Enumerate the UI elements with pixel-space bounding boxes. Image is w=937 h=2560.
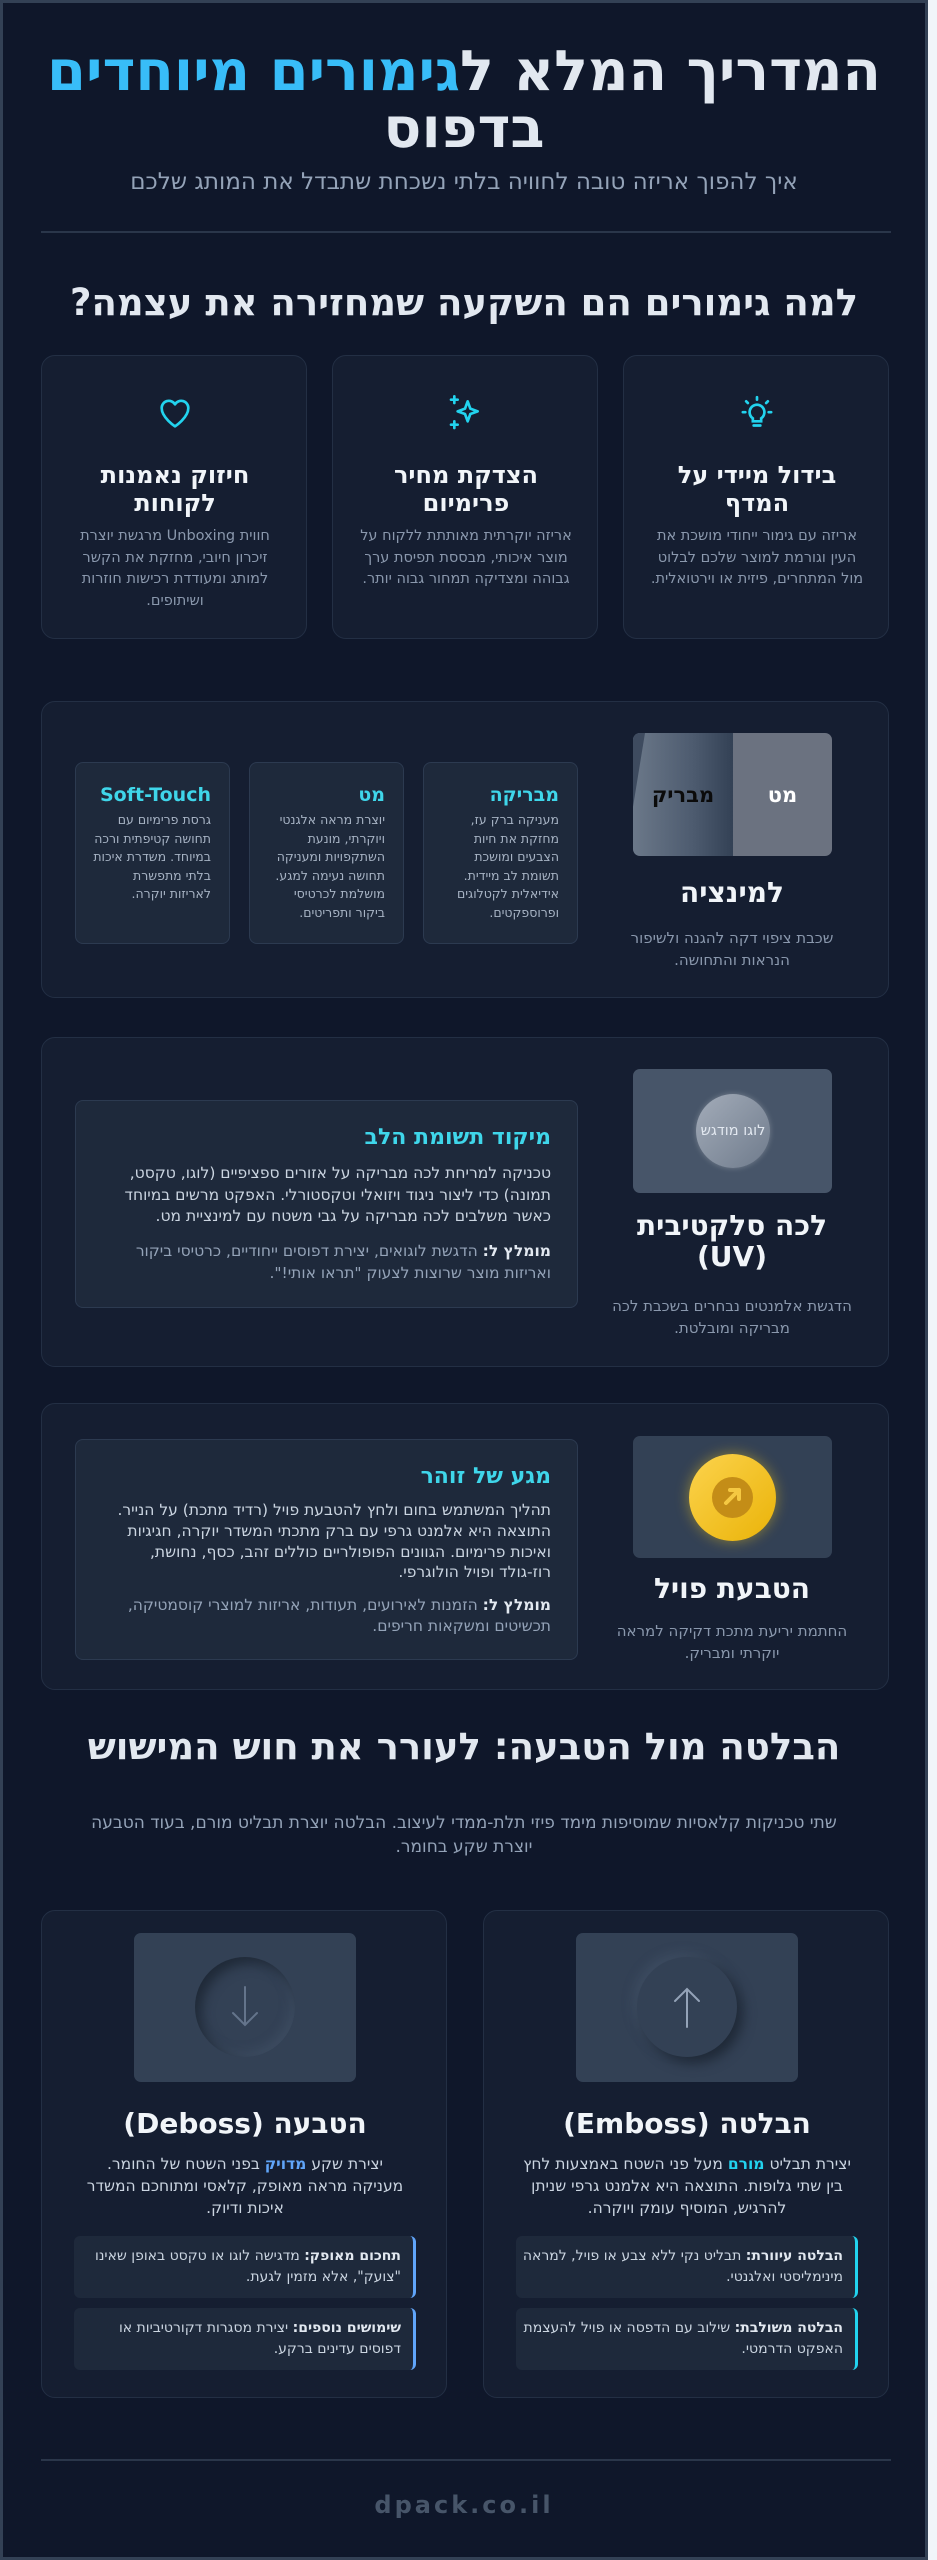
- UV detail box: מומלץ ל: הדגשת לוגואים, יצירת דפוסים ייחודיים, כרטיסי ביקור ואריזות מוצר שרוצות לצעוק "תראו אותי!".: [136, 1242, 551, 1282]
- callout: other uses: [74, 2308, 416, 2370]
- card title: חיזוק נאמנות: [101, 461, 249, 489]
- UV detail box: מיקוד תשומת הלב: [365, 1125, 551, 1150]
- icon: gold coin: [689, 1454, 776, 1541]
- panel: spot UV: [41, 1037, 889, 1367]
- card title: הצדקת מחיר: [394, 461, 538, 489]
- UV visual: [633, 1069, 832, 1193]
- UV text: הדגשת אלמנטים נבחרים בשכבת לכה מבריקה ומובלטת.: [612, 1297, 852, 1337]
- emboss title: הבלטה (Emboss): [563, 2107, 811, 2140]
- sub-card: soft touch: Soft-Touch: [100, 784, 211, 806]
- foil detail box: מגע של זוהר: [421, 1464, 551, 1489]
- sub-card: glossy: [423, 762, 578, 944]
- callout: blind emboss: [516, 2236, 858, 2298]
- sub-card: glossy: מבריקה: [490, 784, 559, 806]
- foil title: הטבעת פויל: [654, 1572, 810, 1605]
- lamination text: שכבת ציפוי דקה להגנה ולשיפור הנראות והתחושה.: [631, 929, 833, 969]
- UV detail box: טכניקה למריחת לכה מבריקה על אזורים ספציפיים (לוגו, טקסט, תמונה) כדי ליצור ניגוד ויזואלי וטקסטורלי. האפקט מרשים במיוחד כאשר משלבים לכה מבריקה על גבי משטח עם למינציית מט.: [124, 1164, 551, 1225]
- sub-card: soft touch: [75, 762, 230, 944]
- UV title: (UV): [697, 1240, 767, 1273]
- card title: בידול מיידי על: [678, 461, 836, 489]
- panel: benefit 2: [332, 355, 598, 639]
- callout: subtle: תחכום מאופק: מדגישה לוגו או טקסט באופן שאינו "צועק", אלא מזמין לגעת.: [95, 2248, 401, 2285]
- UV detail box: [75, 1100, 578, 1308]
- emboss visual: [576, 1933, 798, 2082]
- card title: פרימיום: [423, 489, 509, 517]
- foil detail box: מומלץ ל: הזמנות לאירועים, תעודות, אריזות למוצרי קוסמטיקה, תכשיטים ומשקאות חריפים.: [128, 1596, 551, 1635]
- sub-card: glossy: מעניקה ברק עז, מחזקת את חיות הצבעים ומושכת תשומת לב מיידית. אידיאלית לקטלוגים ופרוספקטים.: [457, 812, 559, 920]
- heading: why finishes: למה גימורים הם השקעה שמחזירה את עצמה?: [70, 281, 858, 324]
- card text: אריזה עם גימור ייחודי מושכת את העין וגורמת למוצר שלכם לבלוט מול המתחרים, פיזית או וירטואלית.: [651, 528, 863, 587]
- section intro: שתי טכניקות קלאסיות שמוסיפות מימד פיזי תלת-ממדי לעיצוב. הבלטה יוצרת תבליט מורם, בעוד הטבעה יוצרת שקע בחומר.: [91, 1813, 837, 1857]
- UV title: לכה סלקטיבית: [637, 1209, 827, 1242]
- panel: benefit 1: [623, 355, 889, 639]
- foil visual: [633, 1436, 832, 1558]
- foil detail box: תהליך המשתמש בחום ולחץ להטבעת פויל (רדיד מתכת) על הנייר. התוצאה היא אלמנט גרפי עם ברק מתכתי המשדר יוקרה, חגיגיות ואיכות פרימיום. הגוונים הפופולריים כוללים זהב, כסף, נחושת, רוז-גולד ופויל הולוגרפי.: [117, 1501, 551, 1581]
- icon: raised circle with up arrow: [637, 1957, 737, 2057]
- callout: combined emboss: [516, 2308, 858, 2370]
- UV title: [637, 1209, 827, 1273]
- panel: emboss: [483, 1910, 889, 2398]
- lamination visual: [633, 733, 832, 856]
- heading: emboss vs deboss: הבלטה מול הטבעה: לעורר את חוש המישוש: [88, 1725, 840, 1768]
- callout: other uses: שימושים נוספים: יצירת מסגרות דקורטיביות או דפוסים עדינים ברקע.: [119, 2320, 401, 2357]
- sub-card: soft touch: גרסת פרימיום עם תחושה קטיפתית ורכה במיוחד. משדרת איכות בלתי מתפשרת לאריזות יוקרה.: [93, 812, 211, 901]
- sub-card: matte: יוצרת מראה אלגנטי ויוקרתי, מונעת השתקפויות ומעניקה תחושה נעימה למגע. מושלמת לכרטיסי ביקור ותפריטים.: [275, 812, 385, 920]
- callout: blind emboss: הבלטה עיוורת: תבליט נקי ללא צבע או פויל, למראה מינימליסטי ואלגנטי.: [523, 2248, 843, 2285]
- panel: foil: [41, 1403, 889, 1690]
- card text: אריזה יוקרתית מאותתת ללקוח על מוצר איכותי, מבססת תפיסת ערך גבוהה ומצדיקה תמחור גבוה יותר.: [360, 528, 572, 587]
- title: המדריך המלא לגימורים מיוחדים: [47, 39, 881, 104]
- icon: lightbulb: [742, 396, 772, 427]
- callout: combined emboss: הבלטה משולבת: שילוב עם הדפסה או פויל להעצמת האפקט הדרמטי.: [524, 2320, 843, 2357]
- card title: המדף: [725, 489, 789, 517]
- lamination visual: מט: [768, 783, 797, 807]
- icon: sparkles: [450, 395, 479, 430]
- footer: domain: dpack.co.il: [374, 2491, 554, 2519]
- card title: [100, 461, 249, 517]
- sub-card: matte: [249, 762, 404, 944]
- card title: לקוחות: [134, 489, 216, 517]
- subtitle: איך להפוך אריזה טובה לחוויה בלתי נשכחת שתבדל את המותג שלכם: [130, 169, 798, 195]
- deboss visual: [134, 1933, 356, 2082]
- lamination visual: מבריק: [652, 783, 714, 807]
- card title: [678, 461, 836, 517]
- title: [47, 39, 881, 161]
- deboss title: הטבעה (Deboss): [123, 2107, 367, 2140]
- icon: highlighted logo circle: לוגו מודגש: [701, 1123, 765, 1139]
- card title: [394, 461, 538, 517]
- icon: highlighted logo circle: [696, 1094, 770, 1168]
- lamination title: למינציה: [680, 876, 784, 909]
- icon: pressed circle with down arrow: [195, 1957, 295, 2057]
- panel: lamination: [41, 701, 889, 998]
- icon: heart: [160, 400, 190, 428]
- panel: benefit 3: [41, 355, 307, 639]
- foil detail box: [75, 1439, 578, 1660]
- sub-card: matte: מט: [358, 784, 385, 806]
- deboss text: יצירת שקע מדויק בפני השטח של החומר. מעניקה מראה מאופק, קלאסי ומתוחכם המשדר איכות ודיוק.: [87, 2155, 403, 2217]
- title: בדפוס: [383, 96, 545, 161]
- card text: חווית Unboxing מרגשת יוצרת זיכרון חיובי, מחזקת את הקשר למותג ומעודדת רכישות חוזרות ושיתופים.: [80, 528, 270, 608]
- panel: deboss: [41, 1910, 447, 2398]
- emboss text: יצירת תבליט מורם מעל פני השטח באמצעות לחץ בין שתי גלופות. התוצאה היא אלמנט גרפי שניתן להרגיש, המוסיף עומק ויוקרה.: [523, 2155, 851, 2217]
- callout: subtle: [74, 2236, 416, 2298]
- foil text: החתמת יריעת מתכת דקיקה למראה יוקרתי ומבריק.: [617, 1622, 847, 1662]
